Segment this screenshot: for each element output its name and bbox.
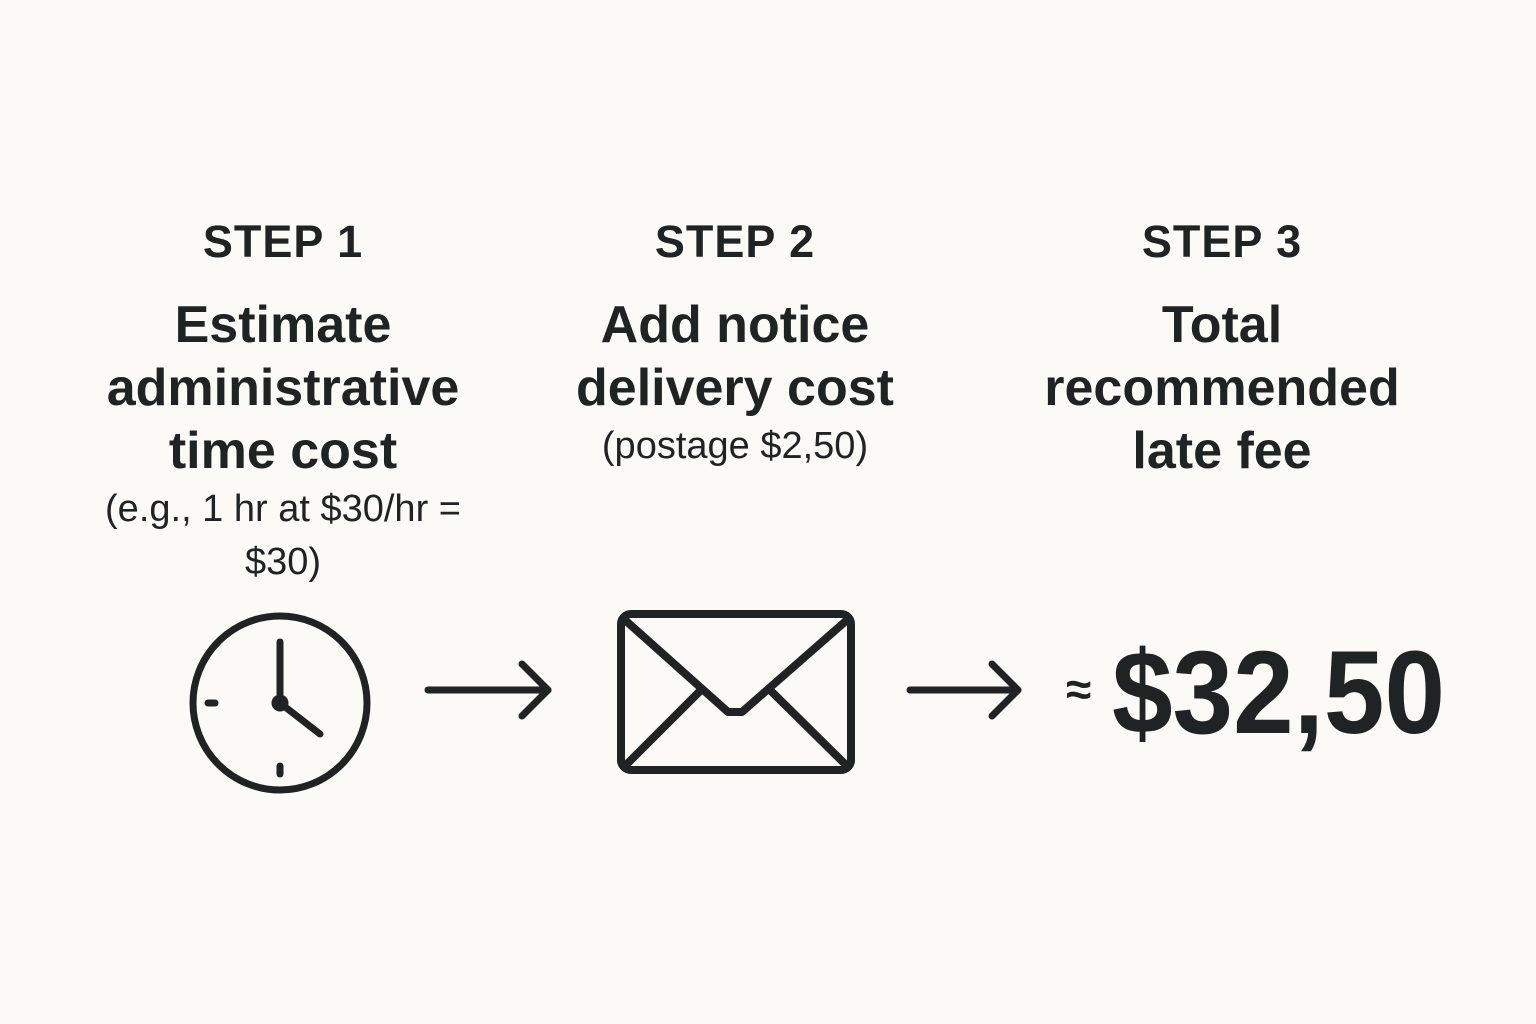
text block: step 1 example bbox=[105, 488, 461, 583]
text block: step 1 title bbox=[107, 296, 459, 480]
text block: step 3 title: late fee bbox=[1132, 422, 1312, 480]
panel: step 3 bbox=[1044, 216, 1400, 480]
icon: envelope bbox=[621, 614, 851, 770]
panel: step 1 bbox=[105, 216, 461, 583]
panel: step 2 bbox=[576, 216, 894, 467]
icon: clock bbox=[193, 616, 367, 790]
text block: step 2 title: Add notice bbox=[601, 296, 869, 354]
text block: step 2 title: delivery cost bbox=[576, 359, 894, 417]
text block: step 2 title bbox=[576, 296, 894, 417]
text block: step 1 example: (e.g., 1 hr at $30/hr = bbox=[105, 488, 461, 530]
text block: step 3 title: recommended bbox=[1044, 359, 1400, 417]
result: total late fee: $32,50 bbox=[1112, 627, 1445, 759]
heading: step 2: STEP 2 bbox=[655, 216, 815, 267]
text block: step 3 title bbox=[1044, 296, 1400, 480]
text block: step 3 title: Total bbox=[1162, 296, 1282, 354]
arrow: step 2 to step 3 bbox=[910, 664, 1018, 716]
heading: step 1: STEP 1 bbox=[203, 216, 363, 267]
text block: step 1 title: administrative bbox=[107, 359, 459, 417]
heading: step 3: STEP 3 bbox=[1142, 216, 1302, 267]
text block: step 1 example: $30) bbox=[245, 541, 321, 583]
text block: step 1 title: time cost bbox=[169, 422, 397, 480]
result: total late fee: ≈ bbox=[1066, 663, 1091, 715]
text block: step 2 postage: (postage $2,50) bbox=[602, 425, 868, 467]
text block: step 1 title: Estimate bbox=[175, 296, 391, 354]
arrow: step 1 to step 2 bbox=[428, 664, 548, 716]
